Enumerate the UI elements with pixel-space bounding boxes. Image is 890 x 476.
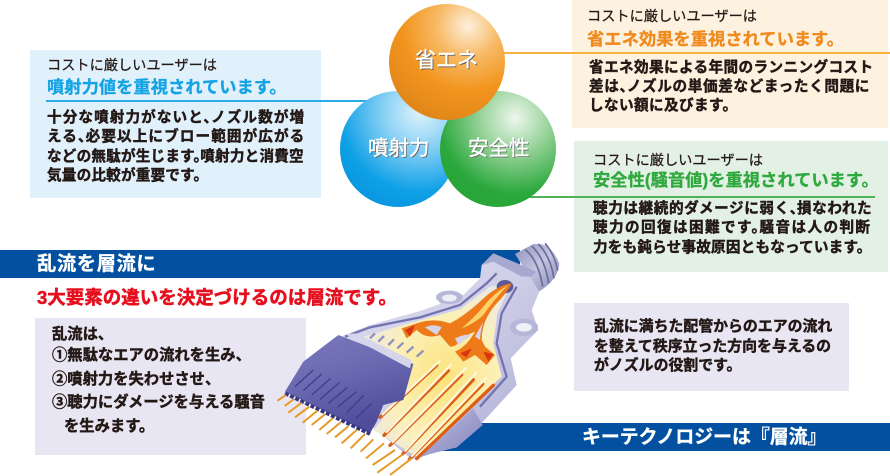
circle: injection force	[340, 91, 456, 207]
heading: key technology: キーテクノロジーは『層流』	[582, 427, 826, 448]
connector: green line	[525, 196, 875, 198]
text: injection force block: 噴射力値を重視されています。	[47, 77, 287, 97]
text: safety block: 安全性(騒音値)を重視されています。	[593, 170, 879, 190]
text: safety block: コストに厳しいユーザーは	[593, 153, 763, 169]
text: injection force block: コストに厳しいユーザーは	[47, 58, 217, 74]
airflow flames	[402, 283, 512, 365]
text: nozzle role: がノズルの役割です。	[594, 358, 741, 374]
mounting hole right	[510, 319, 538, 336]
inlet hole	[497, 280, 513, 293]
chamber wall edge	[345, 273, 517, 407]
text: turbulence list: 乱流は、	[52, 326, 113, 343]
threaded fitting	[515, 243, 559, 291]
lower plate	[420, 408, 483, 457]
text: safety block	[593, 152, 879, 256]
needle channels	[380, 361, 493, 459]
text: turbulence list: を生みます。	[64, 418, 154, 435]
cover ridge	[345, 333, 412, 368]
text: safety block: 力をも鈍らせ事故原因ともなっています。	[593, 240, 872, 256]
text: energy saving block: しない額に及びます。	[589, 98, 737, 114]
label: energy saving circle: 省エネ	[415, 49, 478, 72]
text: injection force block: 十分な噴射力がないと、ノズル数が増	[47, 110, 305, 126]
text: safety block: 聴力は継続的ダメージに弱く、損なわれた	[593, 201, 872, 217]
text: energy saving block	[587, 8, 873, 114]
text: injection force block: 気量の比較が重要です。	[47, 168, 208, 184]
nozzle body	[337, 253, 540, 459]
front cover plate	[285, 335, 413, 433]
panel: injection force	[30, 50, 321, 198]
text: energy saving block: 差は、ノズルの単価差などまったく問題に	[589, 79, 870, 95]
text: safety block: 聴力の回復は困難です。騒音は人の判断	[593, 220, 871, 236]
text: injection force block	[47, 58, 305, 184]
circle: energy saving	[389, 4, 505, 120]
text: energy saving block: コストに厳しいユーザーは	[587, 9, 757, 25]
panel: energy saving	[572, 0, 888, 128]
label: injection force circle: 噴射力	[368, 137, 430, 160]
banner: key technology bar	[440, 423, 890, 451]
connector block top	[482, 253, 537, 277]
text: turbulence list: ③聴力にダメージを与える騒音	[52, 394, 265, 411]
heading: laminar: 乱流を層流に	[37, 254, 156, 275]
illustration: air nozzle	[276, 242, 560, 476]
mounting hole left	[436, 291, 463, 304]
text: energy saving block: 省エネ効果を重視されています。	[587, 29, 844, 49]
baffle spikes	[370, 333, 423, 357]
text: turbulence list: ①無駄なエアの流れを生み、	[52, 347, 251, 364]
connector: blue line	[46, 100, 368, 102]
cover slits	[295, 370, 372, 418]
inner air chamber	[363, 283, 512, 457]
panel: nozzle role	[574, 303, 849, 391]
connector: orange line	[500, 52, 890, 54]
text: turbulence list: ②噴射力を失わせさせ、	[52, 371, 220, 388]
text: injection force block: などの無駄が生じます。噴射力と消費空	[47, 149, 304, 165]
cover nozzle teeth	[285, 393, 370, 434]
label: safety circle: 安全性	[468, 137, 530, 160]
venn circles	[340, 4, 556, 207]
text: nozzle role: を整えて秩序立った方向を与えるの	[594, 339, 831, 355]
panel: turbulence list	[35, 318, 306, 455]
banner: laminar heading bar	[0, 250, 520, 278]
heading: red statement: 3大要素の違いを決定づけるのは層流です。	[37, 287, 397, 308]
text: turbulence list	[52, 326, 265, 435]
air jets	[277, 395, 412, 475]
text: nozzle role: 乱流に満ちた配管からのエアの流れ	[594, 319, 832, 335]
circle: safety	[440, 91, 556, 207]
text: energy saving block: 省エネ効果による年間のランニングコスト	[589, 60, 873, 76]
text: nozzle role	[594, 318, 832, 374]
panel: safety	[574, 141, 888, 272]
text: injection force block: える、必要以上にブロー範囲が広がる	[47, 129, 305, 145]
